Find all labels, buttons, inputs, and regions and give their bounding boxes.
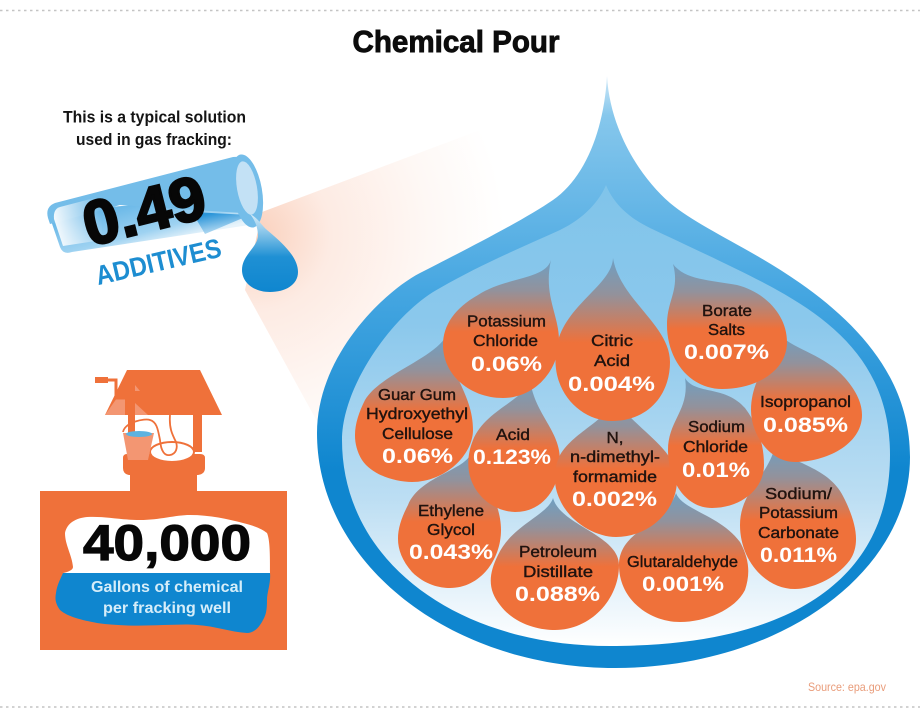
label: Ethylene Glycol 0.043%: Ethylene [418,503,484,520]
droplet: Guar Gum [355,338,473,482]
pouring liquid and small drop [242,214,298,292]
label: Sodium/Potassium Carbonate 0.011% [758,486,839,567]
droplet: Isopropanol [751,335,862,462]
tube upper wall [47,157,260,224]
label: Petroleum Distillate 0.088% [515,544,600,606]
droplet: Petroleum Distillate [491,498,619,630]
title: Chemical Pour [352,24,560,59]
label: Ethylene Glycol 0.043%: 0.043% [409,541,493,564]
label: Citric Acid 0.004%: 0.004% [568,373,655,396]
label: N,n-dimethyl-formamide 0.002% [570,430,660,511]
label: Borate Salts 0.007% [684,303,769,364]
bucket [123,433,154,460]
label: Glutaraldehyde 0.001%: 0.001% [642,573,724,596]
label: Sodium Chloride 0.01%: Sodium [688,419,745,436]
label: Borate Salts 0.007%: 0.007% [684,341,769,364]
label: Glutaraldehyde 0.001%: Glutaraldehyde [627,554,738,571]
projection beam from test tube to large drop [245,100,600,445]
label: Guar Gum Hydroxyethyl Cellulose 0.06%: 0.06% [382,445,453,468]
icon: test tube [47,152,298,292]
label: Glutaraldehyde 0.001% [627,554,738,596]
droplet: N,n-dimethylformamide [555,395,677,537]
label: N,n-dimethyl-formamide 0.002%: N, [606,430,624,447]
label: Guar Gum Hydroxyethyl Cellulose 0.06%: Hydroxyethyl [366,406,468,423]
droplet: Sodium Chloride [668,378,764,508]
label: Ethylene Glycol 0.043% [409,503,493,564]
tube mouth [226,152,268,230]
dotted border bottom [0,706,920,708]
rope [123,415,177,455]
value 40,000: 40,000 [83,515,251,571]
label: Acid 0.123%: Acid [496,427,530,444]
label: Sodium Chloride 0.01% [682,419,750,482]
label: Petroleum Distillate 0.088%: 0.088% [515,583,600,606]
drop inner [342,185,890,646]
tube liquid wedge [192,212,250,234]
droplet: Potassium Chloride [443,260,559,398]
label ADDITIVES: ADDITIVES [93,233,224,291]
label: Citric Acid 0.004%: Citric [591,333,633,350]
label: Guar Gum Hydroxyethyl Cellulose 0.06%: Guar Gum [378,387,456,404]
tube left highlight [54,196,102,246]
well base [40,491,287,650]
intro text: used in gas fracking: [76,130,232,149]
label: N,n-dimethyl-formamide 0.002%: n-dimethyl- [570,449,660,466]
icon: well [40,370,287,650]
label: Acid 0.123% [473,427,551,469]
label: Guar Gum Hydroxyethyl Cellulose 0.06%: Cellulose [382,426,453,443]
caption: Gallons of chemical [91,579,243,596]
label: Acid 0.123%: 0.123% [473,446,551,469]
label: Citric Acid 0.004%: Acid [594,353,630,370]
label: Borate Salts 0.007%: Borate [702,303,752,320]
drop outer band [317,76,910,668]
label: Potassium Chloride 0.06%: Potassium [467,314,546,330]
label: Isopropanol 0.085%: 0.085% [763,414,848,437]
label: Sodium Chloride 0.01%: Chloride [683,439,748,456]
crank handle [106,380,126,398]
label: Isopropanol 0.085%: Isopropanol [760,394,851,411]
label: Sodium/Potassium Carbonate 0.011%: Sodium/ [765,486,833,503]
label: Petroleum Distillate 0.088%: Petroleum [519,544,597,561]
well posts [193,414,202,452]
label: Potassium Chloride 0.06%: 0.06% [471,353,542,376]
label: N,n-dimethyl-formamide 0.002%: formamide [573,469,657,486]
well collar [123,454,205,475]
label: Sodium/Potassium Carbonate 0.011%: Potassium [759,505,838,522]
value 0.49: 0.49 [76,163,213,260]
well shaft [130,470,197,494]
label: Potassium Chloride 0.06% [467,314,546,376]
label: Isopropanol 0.085% [760,394,851,437]
dotted border top [0,10,920,12]
droplet: Borate Salts [667,264,787,389]
droplet: Ethylene Glycol [398,450,501,588]
label: Potassium Chloride 0.06%: Chloride [473,333,538,350]
large water drop [317,76,910,668]
tube lower body [48,195,258,253]
label: Borate Salts 0.007%: Salts [708,322,745,339]
droplet: Citric Acid [555,258,670,421]
label: N,n-dimethyl-formamide 0.002%: 0.002% [572,488,657,511]
well opening [150,442,194,462]
droplet: Acid [468,380,560,512]
caption [91,579,243,617]
label: Citric Acid 0.004% [568,333,655,396]
well roof [105,370,222,415]
droplet: Sodium/Potassium Carbonate [740,445,856,589]
label: Guar Gum Hydroxyethyl Cellulose 0.06% [366,387,468,468]
intro text [63,108,246,149]
droplet: Glutaraldehyde [619,493,748,622]
roof light side [105,398,125,415]
source: Source: epa.gov [808,680,886,694]
blue blob [55,573,270,633]
caption: per fracking well [103,600,231,617]
white blob [63,515,270,573]
label: Ethylene Glycol 0.043%: Glycol [427,522,475,539]
intro text: This is a typical solution [63,108,246,126]
label: Sodium/Potassium Carbonate 0.011%: Carbonate [758,525,839,542]
label: Sodium Chloride 0.01%: 0.01% [682,459,750,482]
label: Sodium/Potassium Carbonate 0.011%: 0.011% [760,544,837,567]
label: Petroleum Distillate 0.088%: Distillate [523,564,593,581]
